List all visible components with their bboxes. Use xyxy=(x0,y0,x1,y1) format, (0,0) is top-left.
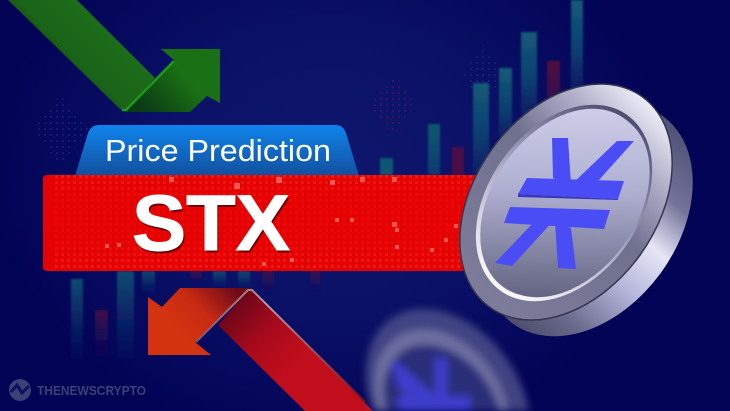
red band with title xyxy=(43,175,490,271)
blurred background coin xyxy=(366,309,529,411)
watermark logo xyxy=(9,379,146,401)
coin front ring xyxy=(460,84,672,320)
icon: logo xyxy=(9,379,31,401)
heading tab: price prediction: Price Prediction xyxy=(105,134,331,168)
watermark text: THENEWSCRYPTO xyxy=(37,383,146,398)
coin face xyxy=(480,109,650,297)
heading tab: price prediction xyxy=(75,125,359,176)
red band with title: STX xyxy=(132,178,290,267)
red arrow xyxy=(148,288,373,411)
title: STX: STX xyxy=(134,180,292,270)
green arrow xyxy=(8,0,220,112)
candlestick bars: upper right xyxy=(380,0,583,175)
coin rim xyxy=(483,104,693,336)
coin xyxy=(460,84,693,336)
icon: STX symbol xyxy=(495,138,634,269)
candlestick bars: below band xyxy=(71,271,320,358)
coin inner lip xyxy=(478,107,650,299)
dotted halftone backgrounds xyxy=(33,45,505,165)
